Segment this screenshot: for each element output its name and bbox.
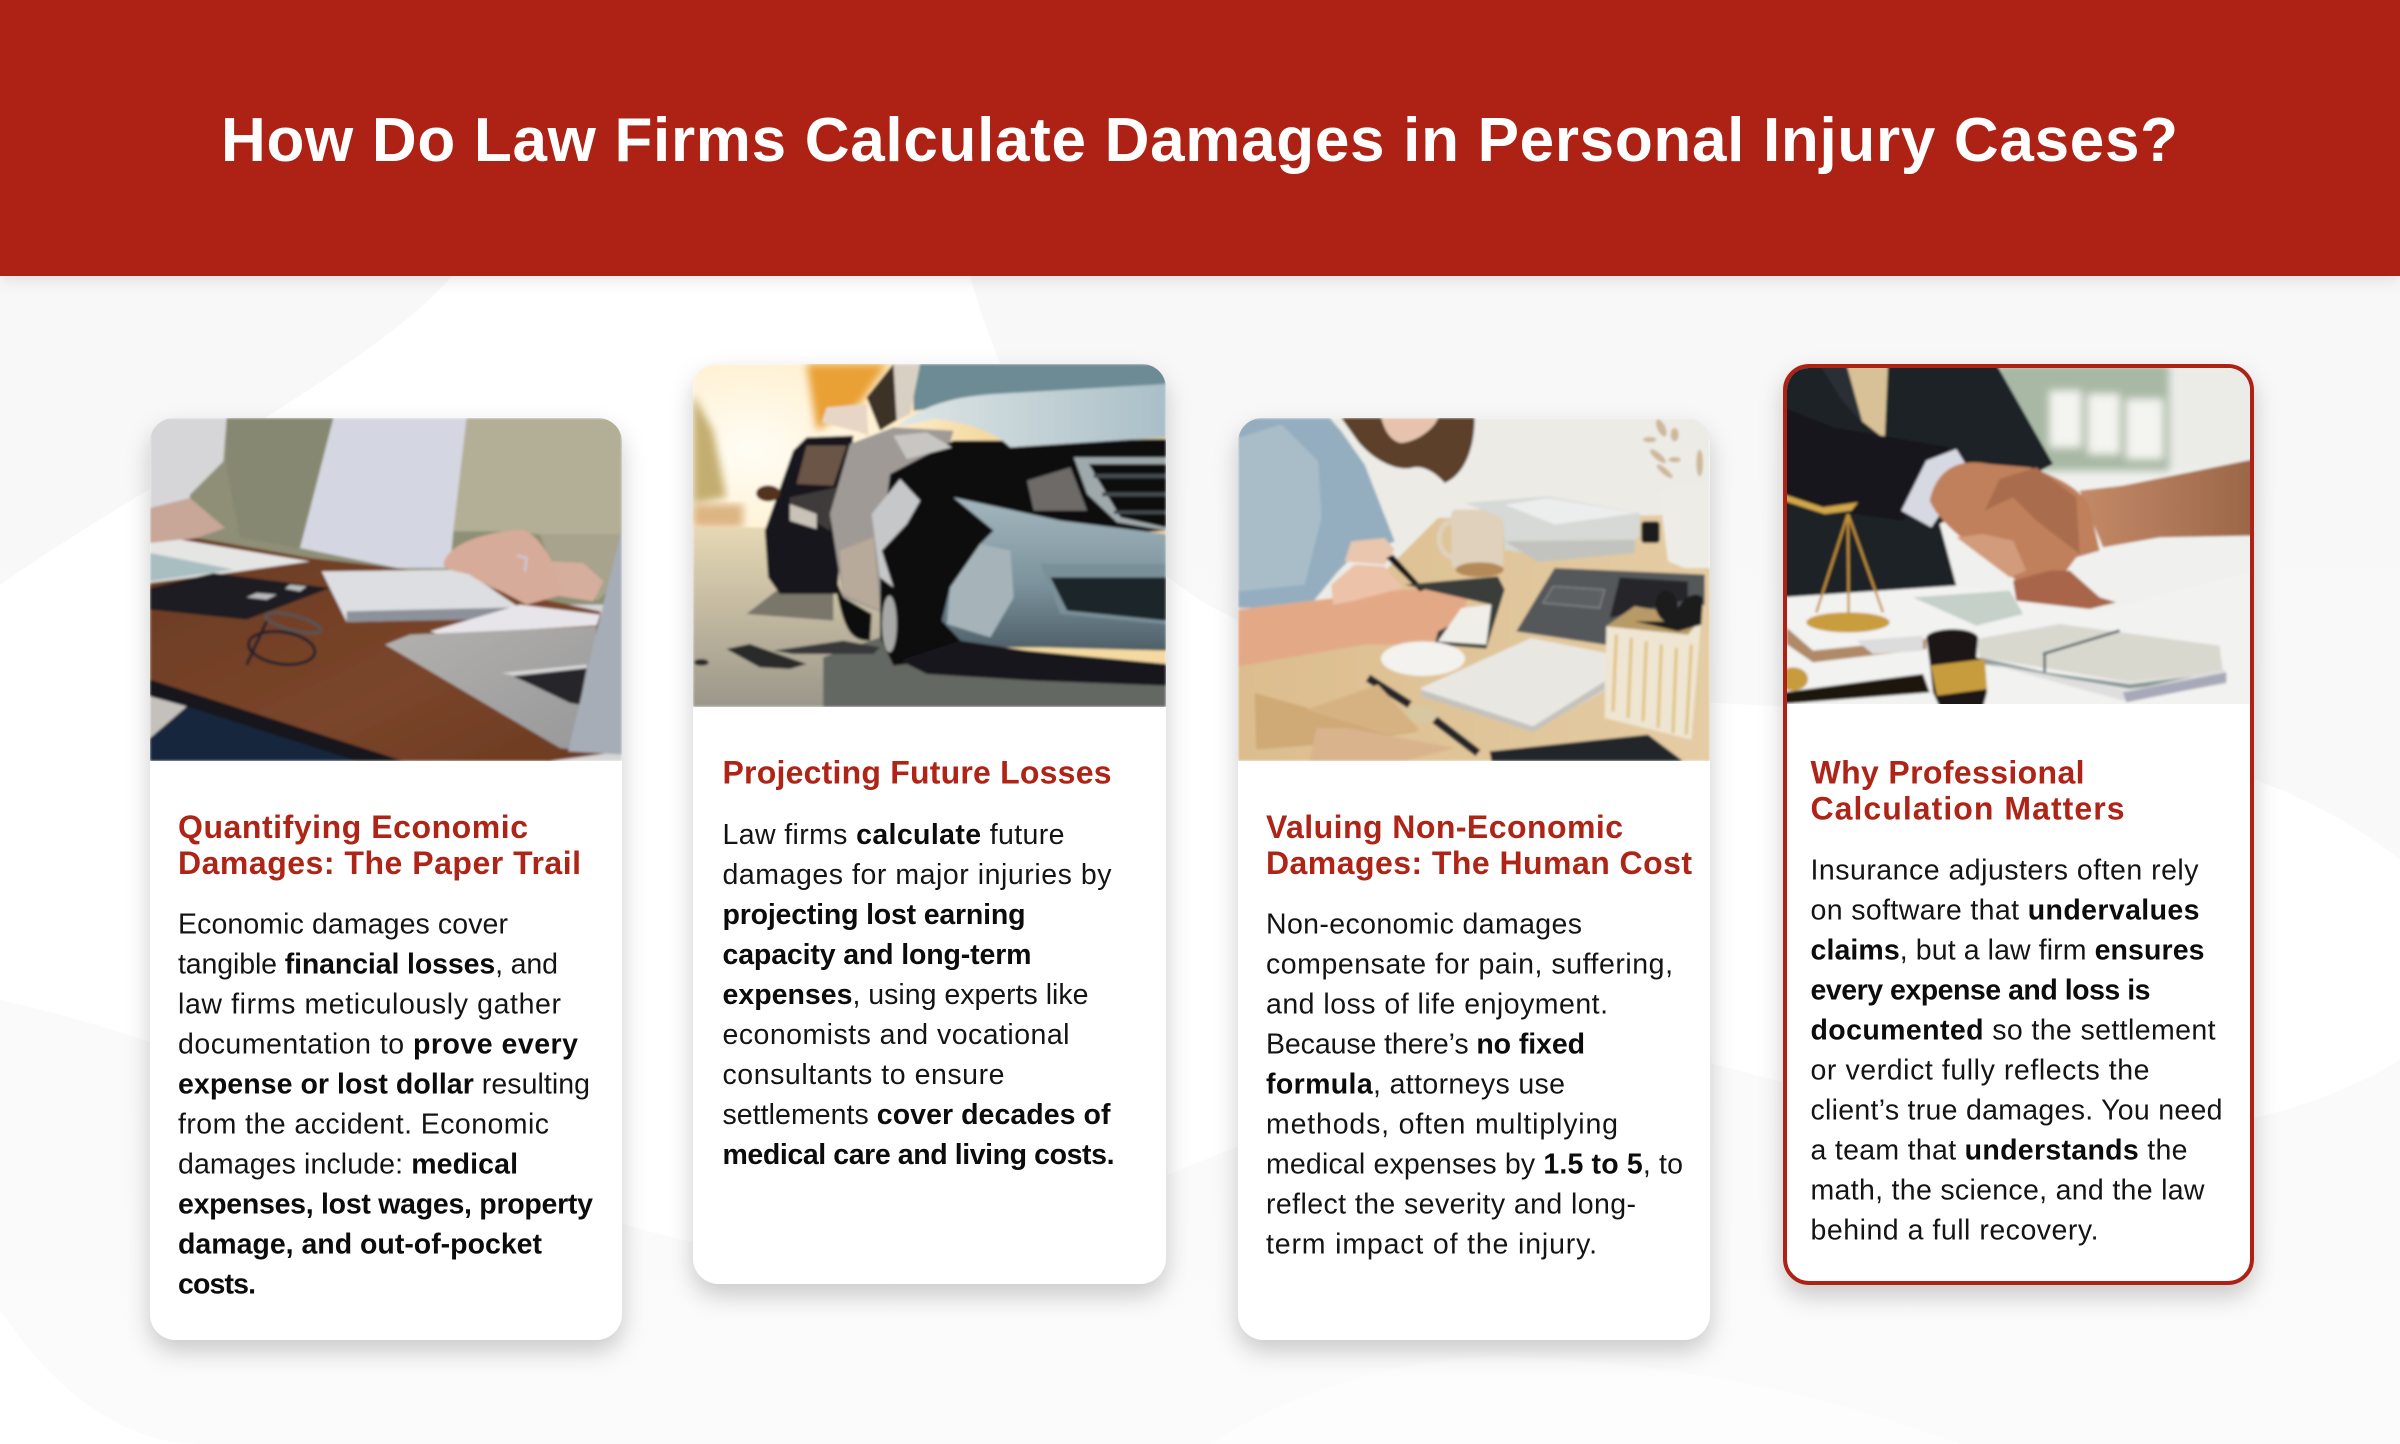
body text: term impact of the injury. [1266,1228,1597,1260]
body text: economists and vocational [722,1019,1070,1051]
envelopes [1255,693,1420,750]
laptop [1516,568,1705,645]
body text: costs. [178,1268,256,1300]
heading [178,809,581,881]
body text [178,908,593,1300]
wheel [882,596,897,652]
watch [1368,678,1478,753]
pen holder and scissors [1604,624,1702,740]
heading: Damages: The Human Cost [1266,845,1692,881]
book with strap [1976,624,2223,682]
body text: Economic damages cover [178,908,508,940]
body text: client’s true damages. You need [1810,1094,2222,1126]
body text: or verdict fully reflects the [1810,1054,2150,1086]
table [1783,571,2255,707]
heading: Valuing Non-Economic [1266,809,1623,845]
body text: documented so the settlement [1810,1014,2216,1046]
heading: Damages: The Paper Trail [178,845,581,881]
body text: medical care and living costs. [722,1139,1114,1171]
body text: math, the science, and the law [1810,1174,2205,1206]
debris [726,644,807,669]
heading [1266,809,1692,881]
body text: Non-economic damages [1266,908,1582,940]
body text: law firms meticulously gather [178,988,562,1020]
panel: why professional calculation matters [1778,364,2255,1283]
heading: Quantifying Economic [178,809,528,845]
body text: tangible financial losses, and [178,948,558,980]
heading: Projecting Future Losses [722,754,1112,790]
denim shirt [1238,418,1395,608]
body text [722,819,1114,1171]
right arm [2080,459,2255,547]
vase with dried flowers [1661,514,1710,570]
heading [1810,754,2124,826]
panel: projecting future losses [693,364,1166,1284]
body text: a team that understands the [1810,1134,2188,1166]
body text: settlements cover decades of [722,1099,1111,1131]
scales of justice [1783,494,1890,632]
body text [1266,908,1683,1260]
rear wheel of damaged car [833,574,872,641]
crumpled fender [872,479,920,587]
photo: damaged car after crash [693,364,1166,707]
forearm [1238,586,1468,666]
body text: Insurance adjusters often rely [1810,854,2199,886]
body text: on software that undervalues [1810,894,2200,926]
body text: consultants to ensure [722,1059,1004,1091]
body text: from the accident. Economic [178,1108,549,1140]
body text: damages for major injuries by [722,859,1112,891]
mouse [1381,641,1465,676]
body text: Because there’s no fixed [1266,1028,1585,1060]
body text: projecting lost earning [722,899,1026,931]
body text: Law firms calculate future [722,819,1064,851]
photo: handshake with scales and gavel [1778,364,2255,707]
phone on desk [1490,735,1683,761]
heading: Why Professional [1810,754,2084,790]
handshake [1930,462,2100,581]
header band [0,0,2400,276]
clipboard [1786,627,1926,662]
windshield [913,364,1166,411]
photo: woman writing at a wooden desk [1238,418,1710,761]
rear car [765,436,853,594]
body text: behind a full recovery. [1810,1214,2098,1246]
body text: and loss of life enjoyment. [1266,988,1608,1020]
white notebook [1421,638,1606,731]
body text: claims, but a law firm ensures [1810,934,2204,966]
body text: formula, attorneys use [1266,1068,1565,1100]
bumper [942,497,1166,651]
body text: expense or lost dollar resulting [178,1068,590,1100]
heading: Calculation Matters [1810,790,2124,826]
mug [1451,510,1503,568]
silver side [830,427,954,617]
hair [1341,418,1475,483]
title: How Do Law Firms Calculate Damages in Personal Injury Cases? [221,106,2178,175]
body text: medical expenses by 1.5 to 5, to [1266,1148,1683,1180]
body text: reflect the severity and long- [1266,1188,1636,1220]
gavel [1778,629,1987,707]
body text: expenses, using experts like [722,979,1088,1011]
body text: capacity and long-term [722,939,1032,971]
body text: every expense and loss is [1810,974,2150,1006]
notebook [1405,576,1505,649]
dark wreck area [880,439,1166,666]
hood [897,384,1166,447]
body text: documentation to prove every [178,1028,578,1060]
body text: compensate for pain, suffering, [1266,948,1673,980]
body text: methods, often multiplying [1266,1108,1618,1140]
suit [1783,364,2053,597]
books [1465,496,1640,555]
panel: quantifying economic damages [150,418,622,1340]
body text: damages include: medical [178,1148,518,1180]
body text: damage, and out-of-pocket [178,1228,542,1260]
body text: expenses, lost wages, property [178,1188,593,1220]
photo: hands on desk with calculator and notebook [150,418,622,761]
panel: valuing non-economic damages [1238,418,1710,1340]
body text [1810,854,2222,1246]
